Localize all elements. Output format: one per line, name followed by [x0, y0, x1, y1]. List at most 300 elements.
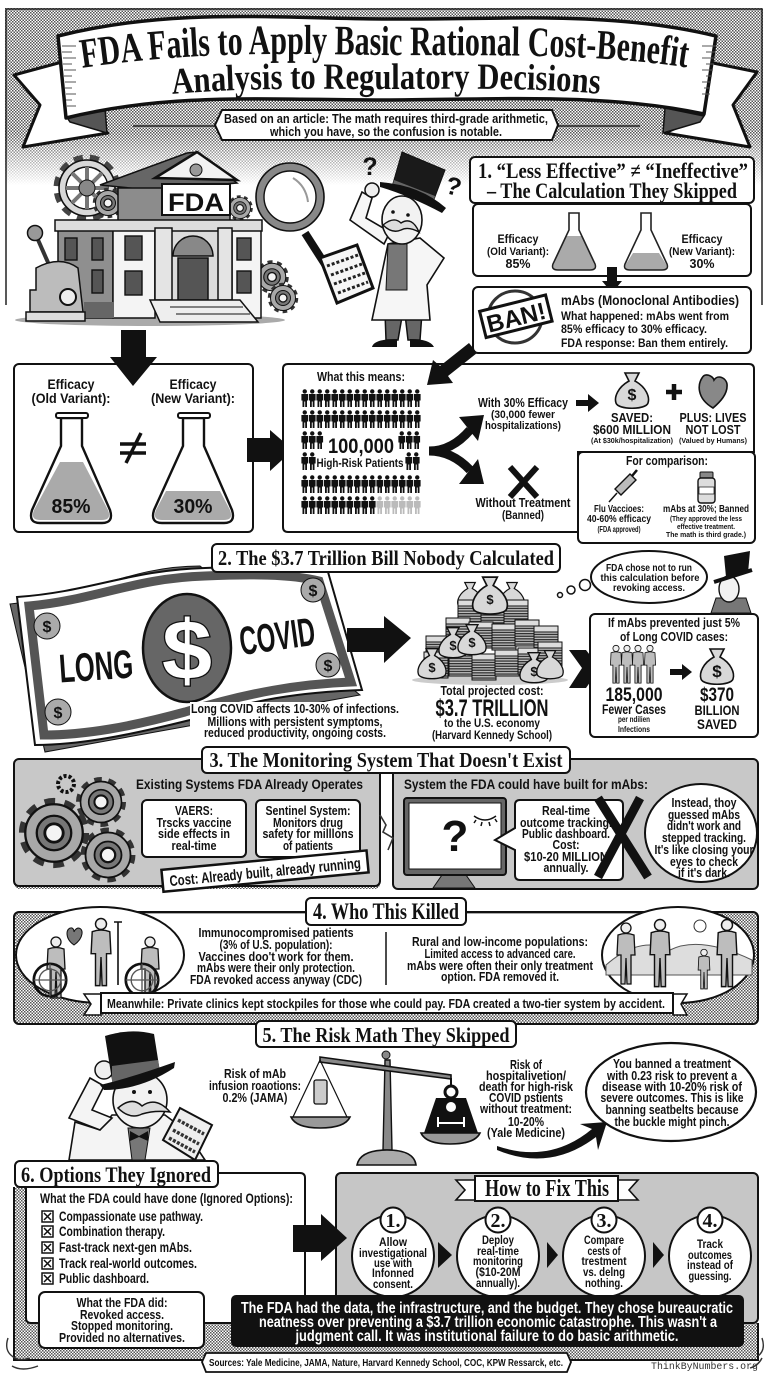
illustration: money pile with bags: $ [530, 664, 538, 679]
icon: ban stamp: BAN! [484, 298, 549, 339]
meanwhile ribbon: Meanwhile: Private clinics kept stockpiles for those whe could pay. FDA created a two-tier system by accident. [107, 997, 665, 1011]
immunocompromised text: (3% of U.S. population): [220, 937, 332, 952]
speech card [495, 800, 623, 880]
big X [598, 798, 648, 877]
illustration: balance scale [291, 1051, 480, 1165]
panel: who this killed [14, 907, 758, 1024]
hospitalization risk text: COVID pstients [489, 1090, 563, 1105]
ellipse: risk conclusion: the buckle might pinch. [614, 1114, 730, 1129]
old variant heading: Efficacy [48, 376, 95, 392]
arrow: forked outcomes [429, 415, 484, 484]
step 4 [669, 1208, 751, 1297]
ellipse: risk conclusion: disease with 10-20% risk of [602, 1079, 743, 1094]
icon: gears cluster [23, 776, 132, 879]
black conclusion bar: judgment call. It was institutional failure to do basic arithmetic. [295, 1328, 678, 1345]
card: what the FDA did: Provided no alternatives. [59, 1330, 185, 1345]
icon: flask 30 percent [625, 213, 667, 270]
Long COVID caption [190, 702, 400, 740]
without treatment text: (Banned) [502, 510, 544, 522]
arrow: small right [670, 664, 692, 680]
arrow: step 3 to 4 [653, 1242, 664, 1268]
hospitalization risk text: 10-20% [508, 1114, 544, 1129]
section 2 header: 2. The $3.7 Trillion Bill Nobody Calculated [218, 546, 554, 570]
speech card: Public dashboard. [522, 826, 610, 841]
thought bubble [558, 551, 707, 603]
illustration: money pile with bags: $ [486, 592, 494, 607]
door [173, 236, 213, 256]
panel: system FDA could have built [393, 759, 758, 889]
step 4: 4. [702, 1210, 718, 1232]
old variant heading [32, 376, 110, 406]
character: confused professor: ? [442, 171, 464, 202]
panel: if mAbs prevented 5 percent: of Long COVID cases: [620, 630, 728, 644]
VAERS card: VAERS: [175, 803, 213, 818]
subtitle box: Based on an article: The math requires third-grade arithmetic, [224, 112, 548, 126]
coat [69, 1115, 205, 1160]
mAbs at 30 percent text [663, 503, 749, 539]
legs and shoes [384, 285, 424, 340]
ellipse note: Instead, thoy [672, 796, 737, 810]
infusion risk text: infusion roaotions: [209, 1078, 301, 1093]
hospitalization risk text: without treatment: [479, 1101, 572, 1116]
banner left tail [14, 62, 108, 147]
step 2: annually). [476, 1276, 520, 1290]
mAbs text: FDA response: Ban them entirely. [561, 336, 728, 350]
hospitalization risk text: (Yale Medicine) [487, 1125, 565, 1140]
card: what the FDA did: Stopped monitoring. [71, 1318, 173, 1333]
Sentinel card: safety for milllons [262, 826, 354, 841]
lever machine [35, 233, 50, 267]
saved text: SAVED: [611, 410, 653, 425]
saved text: (At $30k/hospitalization) [591, 436, 673, 445]
step 2: monitoring [473, 1254, 523, 1268]
illustration: FDA building with gears: FDA [168, 189, 224, 217]
immunocompromised text [190, 925, 362, 987]
rural text: Rural and low-income populations: [412, 934, 588, 949]
panel: options they ignored [26, 1173, 305, 1323]
panel: for comparison [578, 452, 755, 543]
speech card: Cost: [552, 837, 580, 852]
ellipse note [645, 784, 757, 882]
heading: Existing Systems FDA Already Operates [136, 776, 363, 792]
illustration: money pile with bags: $ [449, 638, 457, 653]
flu vaccines text [587, 503, 651, 534]
infusion risk text: Risk of mAb [224, 1066, 286, 1081]
old variant label: (Old Variant): [487, 246, 549, 258]
hospitalization risk text: Risk of [510, 1057, 542, 1072]
thought bubble: revoking access. [613, 582, 685, 594]
illustration: Long COVID dollar bill: $ [324, 658, 333, 675]
370 billion text [694, 685, 740, 732]
building body [58, 228, 113, 318]
banner edge hatching [62, 46, 716, 106]
corner flourishes [7, 1338, 763, 1369]
LONG label: LONG [58, 642, 135, 692]
calculator [163, 1108, 212, 1160]
cost stamp: Cost: Already built, already running [169, 855, 362, 890]
head [113, 1072, 167, 1128]
Long COVID caption: reduced productivity, ongoing costs. [204, 726, 386, 740]
icon: syringe [609, 470, 637, 502]
ellipse note: if it's dark. [678, 866, 730, 880]
saved text [591, 410, 673, 445]
title line 2: Analysis to Regulatory Decisions [172, 63, 600, 98]
top hat [392, 152, 445, 202]
icon: large gear [57, 158, 117, 218]
without treatment text: Without Treatment [476, 496, 571, 510]
step 4: instead of [687, 1258, 734, 1272]
checklist: Fast-track next-gen mAbs. [59, 1240, 192, 1255]
hospitalization risk text: hospitalivetion/ [486, 1068, 566, 1083]
people grid: 100,000 high-risk patients [301, 389, 421, 516]
step 2: real-time [477, 1244, 519, 1258]
character: confused professor [350, 152, 464, 347]
illustration: money pile with bags [412, 577, 568, 685]
panel: existing systems [14, 759, 380, 892]
subtitle box: which you have, so the confusion is notable. [269, 125, 502, 139]
icon: group of people [610, 645, 656, 683]
roof [100, 152, 237, 190]
panel: large efficacy comparison [14, 364, 253, 532]
people grid: 100,000 high-risk patients: High-Risk Patients [316, 458, 404, 470]
rural text: option. FDA removed it. [441, 969, 559, 984]
flu vaccines text: 40-60% efficacy [587, 513, 651, 525]
ribbon heading: How to Fix This [485, 1176, 609, 1202]
speech card: annually. [544, 860, 588, 875]
nurse [91, 918, 111, 986]
mAbs text: 85% efficacy to 30% efficacy. [561, 322, 707, 336]
with 30 percent efficacy text: hospitalizations) [485, 420, 561, 432]
icon: heart [67, 928, 82, 945]
hospitalization risk text: death for high-risk [479, 1079, 574, 1094]
Long COVID caption: Millions with persistent symptoms, [208, 715, 382, 729]
step 3: vs. delng [583, 1265, 625, 1279]
illustration: FDA building with gears [15, 152, 296, 326]
ellipse: risk conclusion: You banned a treatment [613, 1056, 732, 1071]
title banner [12, 14, 758, 148]
illustration: money pile with bags: $ [468, 635, 476, 650]
185,000 text [602, 685, 666, 734]
raised arm [69, 1078, 112, 1130]
Sentinel card [256, 800, 360, 857]
patient in wheelchair [34, 937, 66, 998]
rural text [407, 934, 594, 984]
icon: X mark [510, 467, 537, 497]
FDA sign [162, 184, 230, 215]
plus sign [666, 384, 682, 400]
step 3: 3. [596, 1210, 612, 1232]
old variant label: 85% [506, 257, 530, 271]
icon: large flask 30 percent: 30% [174, 496, 213, 518]
lives not lost text: PLUS: LIVES [680, 410, 747, 425]
step 3: trestment [582, 1254, 626, 1268]
head with moustache [382, 196, 422, 244]
checklist: Combination therapy. [59, 1224, 165, 1239]
section 3 header: 3. The Monitoring System That Doesn't Exist [210, 748, 563, 772]
total projected cost text: $3.7 TRILLION [436, 695, 548, 722]
lives not lost text: (Valued by Humans) [679, 436, 747, 445]
arrow: bill to money pile [347, 616, 411, 663]
checklist: Track real-world outcomes. [59, 1256, 197, 1271]
new variant heading: Efficacy [170, 376, 217, 392]
panel: how to fix this [336, 1173, 758, 1323]
old variant label: Efficacy [498, 232, 539, 246]
step 4: Track [697, 1237, 723, 1251]
new variant heading [151, 376, 235, 406]
checklist: Compassionate use pathway. [59, 1209, 203, 1224]
new variant label [669, 232, 735, 271]
columns [155, 228, 172, 300]
arrow: step 2 to 3 [547, 1242, 558, 1268]
illustration: money pile with bags: $ [428, 660, 436, 675]
185,000 text: Infections [618, 724, 650, 734]
step 3: Compare [584, 1233, 624, 1247]
right pan with weight [421, 1078, 480, 1144]
character: professor with calculator [69, 1031, 212, 1160]
icon: blank monitor: ? [442, 812, 468, 861]
icon: abacus [320, 245, 373, 303]
IV pole [114, 922, 122, 985]
arrow: curved to conclusion [497, 1122, 607, 1158]
character: small professor thinking [711, 551, 752, 613]
hand [95, 1061, 113, 1079]
banner body [58, 16, 716, 118]
immunocompromised text: mAbs were their only protection. [197, 960, 355, 975]
icon: large flask 85 percent: 85% [52, 496, 91, 518]
icon: flask 85 percent [553, 213, 595, 270]
step 4: outcomes [688, 1248, 732, 1262]
step 3: nothing. [585, 1276, 623, 1290]
thought bubble: FDA chose not to run [606, 562, 692, 574]
illustration: Long COVID dollar bill: $ [43, 619, 52, 636]
hospitalization risk text [479, 1057, 574, 1140]
ellipse note: stepped tracking. [662, 831, 746, 845]
oval: patients illustration [16, 907, 184, 1003]
icon: money bag saved [616, 373, 648, 408]
black conclusion bar [231, 1295, 744, 1347]
mAbs at 30 percent text: The math is third grade.) [666, 530, 746, 539]
370 billion text: BILLION [694, 702, 740, 718]
old variant label [487, 232, 549, 271]
step 4: guessing. [688, 1269, 732, 1283]
370 billion text: SAVED [697, 716, 737, 732]
total projected cost text: to the U.S. economy [444, 716, 540, 730]
bill center dollar medallion: $ [162, 603, 212, 697]
icon: blank monitor [404, 798, 506, 888]
section 5 header: 5. The Risk Math They Skipped [262, 1023, 510, 1047]
step 1 [352, 1208, 434, 1297]
beam [320, 1057, 451, 1079]
thought bubble: this calculation before [600, 572, 700, 584]
bottom hatched strip [14, 1187, 758, 1360]
icon: money bag: $ [712, 662, 722, 681]
banner folds [66, 108, 107, 133]
panel: for comparison: For comparison: [626, 454, 708, 468]
with 30 percent efficacy text [478, 396, 568, 432]
immunocompromised text: FDA revoked access anyway (CDC) [190, 972, 362, 987]
arrow: building down to efficacy panel [110, 330, 157, 386]
illustration: Long COVID dollar bill [10, 566, 362, 752]
step 3: cests of [588, 1244, 621, 1258]
Sentinel card: of patients [283, 838, 333, 853]
arrow: small right [576, 394, 599, 412]
people grid: 100,000 high-risk patients: 100,000 [328, 435, 394, 458]
sources box [202, 1353, 571, 1372]
meanwhile ribbon [84, 993, 687, 1015]
ellipse: risk conclusion: with 0.23 risk to prevent a [606, 1068, 738, 1083]
step 3 [563, 1208, 645, 1297]
icon: large flask 85 percent [31, 413, 111, 523]
with 30 percent efficacy text: (30,000 fewer [491, 409, 556, 421]
not equal sign [120, 433, 146, 463]
card: what the FDA did [39, 1292, 204, 1348]
title line 1: FDA Fails to Apply Basic Rational Cost-Benefit [78, 24, 690, 68]
oval: rural families illustration [602, 907, 754, 1003]
VAERS card: Trscks vaccine [156, 815, 232, 830]
ellipse note: guessed mAbs [668, 808, 740, 822]
subtitle box [133, 110, 640, 140]
VAERS card: real-time [172, 838, 216, 853]
arrow: options to fixes [293, 1214, 347, 1261]
heading: What this means: [317, 369, 405, 384]
immunocompromised text: Immunocompromised patients [198, 925, 354, 940]
icon: large flask 30 percent [153, 413, 233, 523]
step 1: 1. [386, 1210, 400, 1232]
steps [150, 300, 258, 322]
step 1: use with [374, 1256, 412, 1270]
illustration: Long COVID dollar bill: $ [309, 583, 318, 600]
panel: what this means [283, 364, 754, 532]
step 2: 2. [490, 1210, 506, 1232]
step 1: Infonned [372, 1266, 414, 1280]
crack between panels [380, 815, 393, 850]
checklist: Public dashboard. [59, 1271, 149, 1286]
Sentinel card: Monitors drug [273, 815, 343, 830]
panel: if mAbs prevented 5 percent [590, 614, 758, 737]
question marks: ? [362, 153, 378, 181]
patient in wheelchair [126, 937, 159, 998]
immunocompromised text: Vaccines doo't work for them. [198, 949, 354, 964]
step 1: Allow [379, 1235, 408, 1249]
flu vaccines text: Flu Vaccioes: [594, 503, 644, 515]
speech card: $10-20 MILLION [524, 849, 608, 864]
panel: mAbs ban [473, 287, 751, 353]
total projected cost text: Total projected cost: [440, 683, 544, 698]
icon: money bag saved: $ [628, 387, 637, 404]
ellipse note: didn't work and [667, 819, 741, 833]
lab coat [372, 238, 444, 320]
sources box: Sources: Yale Medicine, JAMA, Nature, Harvard Kennedy School, COC, KPW Ressarck, etc. [209, 1358, 563, 1369]
icon: medicine vial [698, 472, 715, 503]
bill corner medallions [34, 578, 340, 725]
card: what the FDA did: What the FDA did: [76, 1295, 168, 1310]
185,000 text: 185,000 [606, 685, 662, 706]
mAbs text: What happened: mAbs went from [561, 309, 729, 323]
Sentinel card: Sentinel System: [266, 803, 350, 818]
rural text: Limited access to advanced care. [424, 946, 576, 961]
new variant heading: (New Variant): [151, 390, 235, 406]
old variant heading: (Old Variant): [32, 390, 110, 406]
ellipse note: eyes to check [670, 855, 738, 869]
icon: heart [699, 375, 727, 408]
new variant label: (New Variant): [669, 246, 735, 258]
bill center dollar medallion [143, 594, 231, 702]
ellipse: risk conclusion: banning seatbelts because [606, 1102, 738, 1117]
VAERS card: side effects in [158, 826, 230, 841]
arrow: ban panel to what this means [427, 343, 477, 385]
watermark: ThinkByNumbers.org [651, 1361, 758, 1373]
flu vaccines text: (FDA approved) [598, 524, 641, 534]
mAbs text [561, 293, 739, 350]
heading: System the FDA could have built for mAbs: [404, 776, 648, 792]
page frame with halftone header background [5, 8, 763, 305]
mAbs at 30 percent text: effective treatment. [677, 522, 735, 531]
icon: money bag [701, 649, 733, 684]
icon: magnifying glass [256, 163, 337, 283]
infusion risk text: 0.2% (JAMA) [222, 1090, 288, 1105]
speech card: Real-time [542, 803, 590, 818]
left pan [291, 1060, 350, 1128]
card: what the FDA did: Revoked access. [80, 1307, 164, 1322]
step 2 [457, 1208, 539, 1297]
Long COVID caption: Long COVID affects 10-30% of infections. [191, 702, 399, 716]
divider [385, 932, 387, 985]
without treatment text [476, 496, 571, 522]
step 1: investigational [359, 1246, 427, 1260]
185,000 text: per ndilien [618, 714, 650, 724]
total projected cost text [432, 683, 552, 742]
step 1: consent. [373, 1277, 413, 1291]
ellipse: risk conclusion [586, 1043, 756, 1141]
370 billion text: $370 [700, 685, 734, 706]
arrow: step 1 to 2 [438, 1242, 452, 1268]
saved text: $600 MILLION [593, 422, 671, 437]
icon: right gears [257, 262, 287, 292]
step 2: Deploy [482, 1233, 514, 1247]
panel: efficacy comparison small [473, 204, 751, 276]
mAbs at 30 percent text: (They approved the less [670, 514, 742, 523]
section 1 header [470, 157, 754, 203]
section 6 header: 6. Options They Ignored [21, 1162, 211, 1187]
step 2: ($10-20M [476, 1265, 521, 1279]
list heading: What the FDA could have done (Ignored Options): [40, 1191, 293, 1206]
new variant label: 30% [690, 257, 714, 271]
panel: if mAbs prevented 5 percent: If mAbs prevented just 5% [608, 616, 740, 630]
total projected cost text: (Harvard Kennedy School) [432, 728, 552, 742]
VAERS card [142, 800, 246, 857]
lives not lost text [679, 410, 747, 445]
lives not lost text: NOT LOST [686, 422, 741, 437]
arrow: flasks down to ban [602, 267, 622, 293]
COVID label: COVID [237, 610, 318, 664]
section 4 header: 4. Who This Killed [313, 899, 459, 924]
arrow: efficacy panel to what this means [247, 430, 293, 471]
top hat [105, 1031, 160, 1080]
mAbs text: mAbs (Monoclonal Antibodies) [561, 293, 739, 308]
185,000 text: Fewer Cases [602, 702, 666, 717]
with 30 percent efficacy text: With 30% Efficacy [478, 396, 568, 410]
raised arm [350, 192, 390, 244]
arrow: chevron to savings box [569, 650, 600, 688]
speech card: outcome tracking. [520, 815, 612, 830]
new variant label: Efficacy [682, 232, 723, 246]
icon: ban stamp [480, 291, 553, 343]
banner right tail [665, 62, 757, 147]
scale post and base [383, 1060, 392, 1150]
checklist [42, 1209, 203, 1286]
rural text: mAbs were often their only treatment [407, 958, 594, 973]
infusion risk text [209, 1066, 301, 1105]
